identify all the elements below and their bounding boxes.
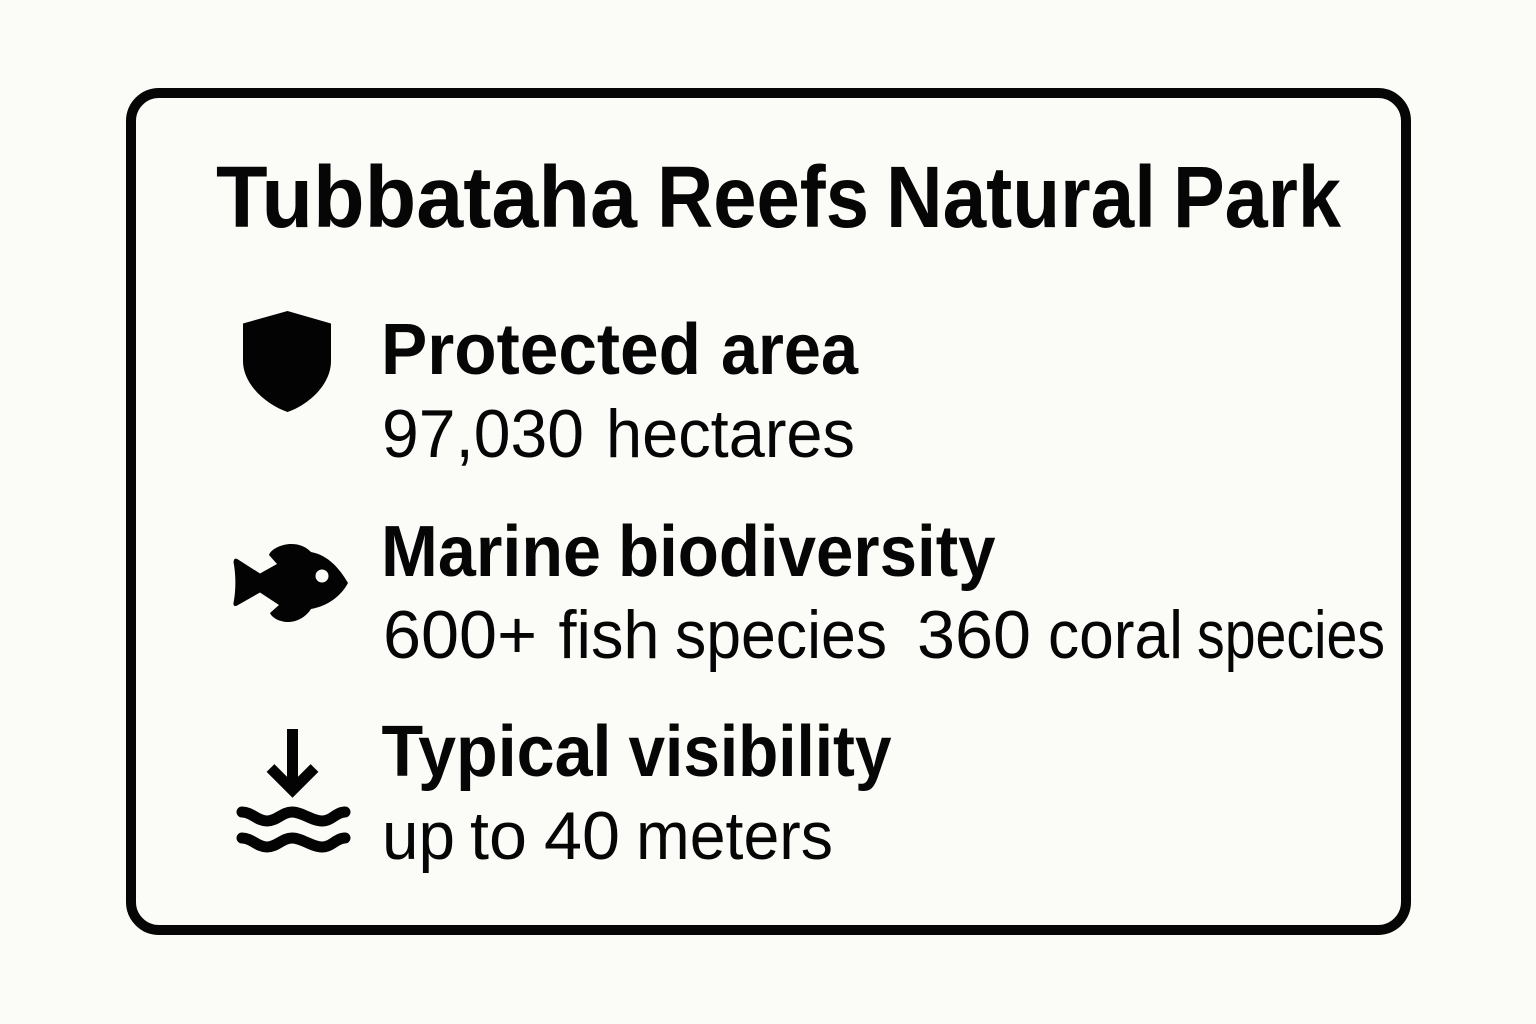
title: Park [1173, 149, 1342, 246]
heading: protected area: area [721, 310, 859, 390]
row: typical visibility [242, 712, 892, 874]
title: Natural [886, 149, 1156, 246]
text: fish species: fish [558, 597, 660, 673]
title: Reefs [657, 149, 869, 246]
row: marine biodiversity [233, 512, 1385, 673]
icon: fish [233, 544, 348, 622]
text: coral species: 360 [917, 597, 1031, 673]
heading: typical visibility: visibility [628, 712, 892, 792]
text: coral species: coral [1048, 597, 1183, 673]
text: fish species: species [675, 597, 887, 673]
text: fish species: 600+ [383, 597, 537, 673]
heading: protected area: Protected [381, 310, 701, 390]
icon: shield [243, 311, 331, 412]
title: Tubbataha [216, 149, 638, 246]
heading: marine biodiversity [381, 512, 996, 592]
row: protected area [243, 310, 859, 472]
text: visibility range [382, 798, 833, 874]
title [216, 149, 1342, 246]
text: visibility range: meters [636, 798, 833, 874]
heading: typical visibility [382, 712, 892, 792]
text: hectares: hectares [606, 396, 855, 472]
text: coral species [917, 597, 1385, 673]
panel: park facts card [131, 93, 1406, 930]
heading: typical visibility: Typical [382, 712, 612, 792]
icon: depth arrow over waves [242, 729, 345, 847]
heading: marine biodiversity: biodiversity [618, 512, 996, 592]
text: visibility range: up [382, 798, 455, 874]
heading: marine biodiversity: Marine [381, 512, 601, 592]
text: visibility range: to [470, 798, 527, 874]
text: hectares: 97,030 [382, 396, 584, 472]
text: visibility range: 40 [544, 798, 620, 874]
text: fish species [383, 597, 887, 673]
text: coral species: species [1197, 597, 1385, 673]
text: hectares [382, 396, 855, 472]
heading: protected area [381, 310, 859, 390]
